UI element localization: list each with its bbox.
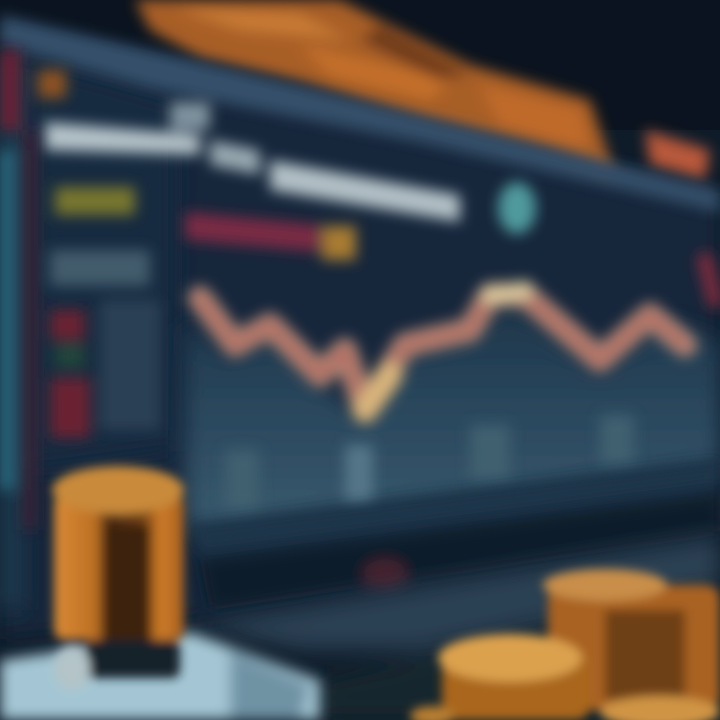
red and gold label	[185, 212, 356, 260]
white subtitle bars	[45, 102, 460, 222]
chart volume columns	[225, 415, 634, 510]
top frame band	[0, 15, 720, 212]
desk surface	[0, 632, 320, 720]
left column panel	[0, 60, 175, 610]
monitor base strip	[190, 535, 720, 720]
teal icon	[498, 182, 536, 234]
orange side tag	[645, 130, 710, 180]
coin stacks	[410, 569, 720, 720]
orange headline	[135, 0, 615, 175]
screen lower edge	[190, 460, 720, 610]
side list labels	[0, 50, 160, 530]
price line	[200, 260, 715, 410]
line chart area fill	[185, 300, 720, 530]
orange cylinder	[52, 466, 184, 690]
